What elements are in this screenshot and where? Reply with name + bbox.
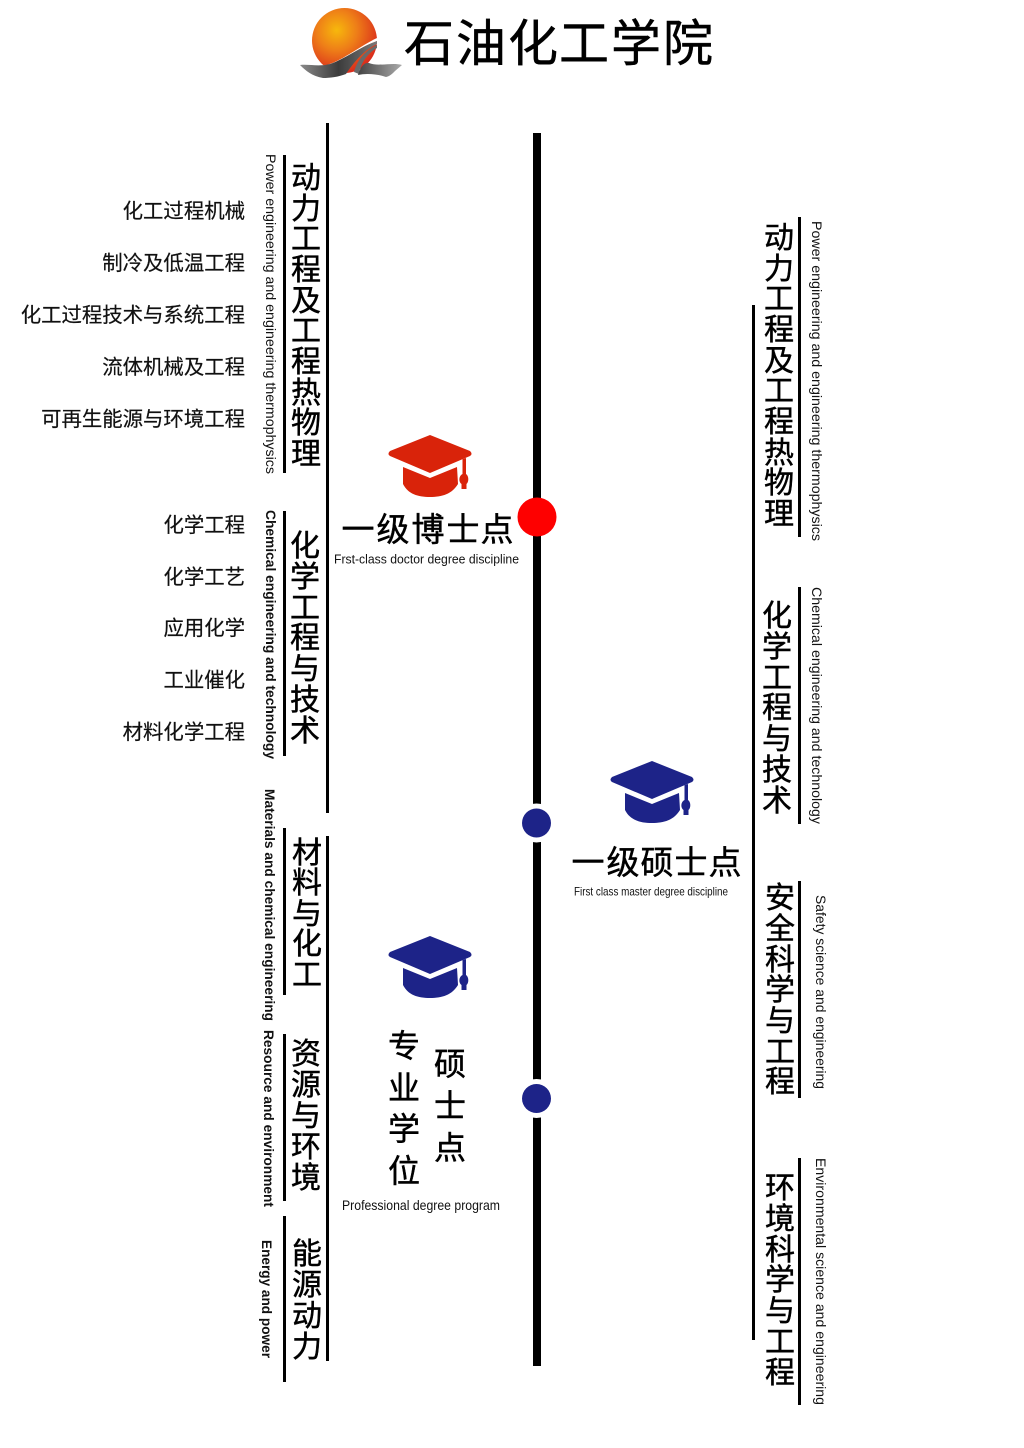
heading: professional degree: 硕士点 [434, 1039, 466, 1169]
heading: professional degree [342, 1021, 500, 1213]
icon: red graduation cap [388, 435, 472, 497]
panel: left doctor disciplines: 化学工程 [163, 508, 245, 538]
panel: left doctor disciplines: Power engineering and engineering thermophysics [263, 154, 279, 474]
logo [300, 8, 402, 78]
panel: left doctor disciplines: Chemical engineering and technology [263, 510, 278, 759]
panel: right master disciplines: Chemical engineering and technology [809, 587, 825, 824]
panel: left doctor disciplines: 应用化学 [163, 611, 245, 641]
panel: left doctor disciplines: 化工过程机械 [123, 194, 245, 224]
panel: right master disciplines: 环境科学与工程 [765, 1163, 795, 1392]
panel: left doctor disciplines: 制冷及低温工程 [102, 246, 245, 276]
panel: left professional programs [259, 789, 329, 1382]
panel: right master disciplines [752, 213, 829, 1405]
panel: left doctor disciplines [21, 123, 329, 813]
panel: left doctor disciplines: 化学工程与技术 [290, 521, 320, 750]
icon: blue graduation cap professional [388, 936, 472, 998]
panel: left doctor disciplines: 流体机械及工程 [102, 350, 245, 380]
panel: right master disciplines: Safety science and engineering [813, 895, 829, 1089]
panel: left doctor disciplines: 材料化学工程 [123, 715, 245, 745]
red node: doctor degree [518, 498, 556, 536]
panel: right master disciplines: 安全科学与工程 [765, 873, 795, 1101]
panel: right master disciplines: Environmental science and engineering [813, 1158, 829, 1405]
panel: left professional programs: Energy and power [259, 1240, 274, 1359]
panel: left doctor disciplines: 化学工艺 [163, 560, 245, 590]
central timeline [533, 133, 541, 1366]
panel: left professional programs: 资源与环境 [291, 1029, 321, 1197]
panel: left professional programs: Materials and chemical engineering [262, 789, 277, 1021]
panel: left doctor disciplines: 化工过程技术与系统工程 [21, 298, 245, 328]
panel: left doctor disciplines: 工业催化 [163, 663, 245, 693]
panel: right master disciplines: Power engineering and engineering thermophysics [809, 221, 825, 541]
blue node: master degree [522, 808, 551, 838]
panel: left doctor disciplines: 动力工程及工程热物理 [291, 153, 321, 473]
heading: first-class doctor: 一级博士点 [342, 503, 514, 551]
panel: left doctor disciplines: 可再生能源与环境工程 [41, 402, 245, 432]
panel: left professional programs: 能源动力 [292, 1229, 322, 1366]
heading: first-class master: First class master degree discipline [574, 884, 728, 898]
panel: left professional programs: 材料与化工 [292, 828, 322, 994]
icon: blue graduation cap master [610, 761, 694, 823]
panel: right master disciplines: 化学工程与技术 [762, 591, 792, 820]
panel: right master disciplines: 动力工程及工程热物理 [764, 213, 794, 533]
blue node: professional degree [522, 1084, 551, 1113]
heading: first-class doctor: Frst-class doctor degree discipline [334, 552, 519, 566]
heading: professional degree: Professional degree program [342, 1197, 500, 1213]
heading: first-class master: 一级硕士点 [572, 836, 742, 884]
panel: left professional programs: Resource and environment [261, 1030, 276, 1208]
heading: professional degree: 专业学位 [388, 1021, 420, 1192]
title: 石油化工学院 [404, 4, 713, 76]
